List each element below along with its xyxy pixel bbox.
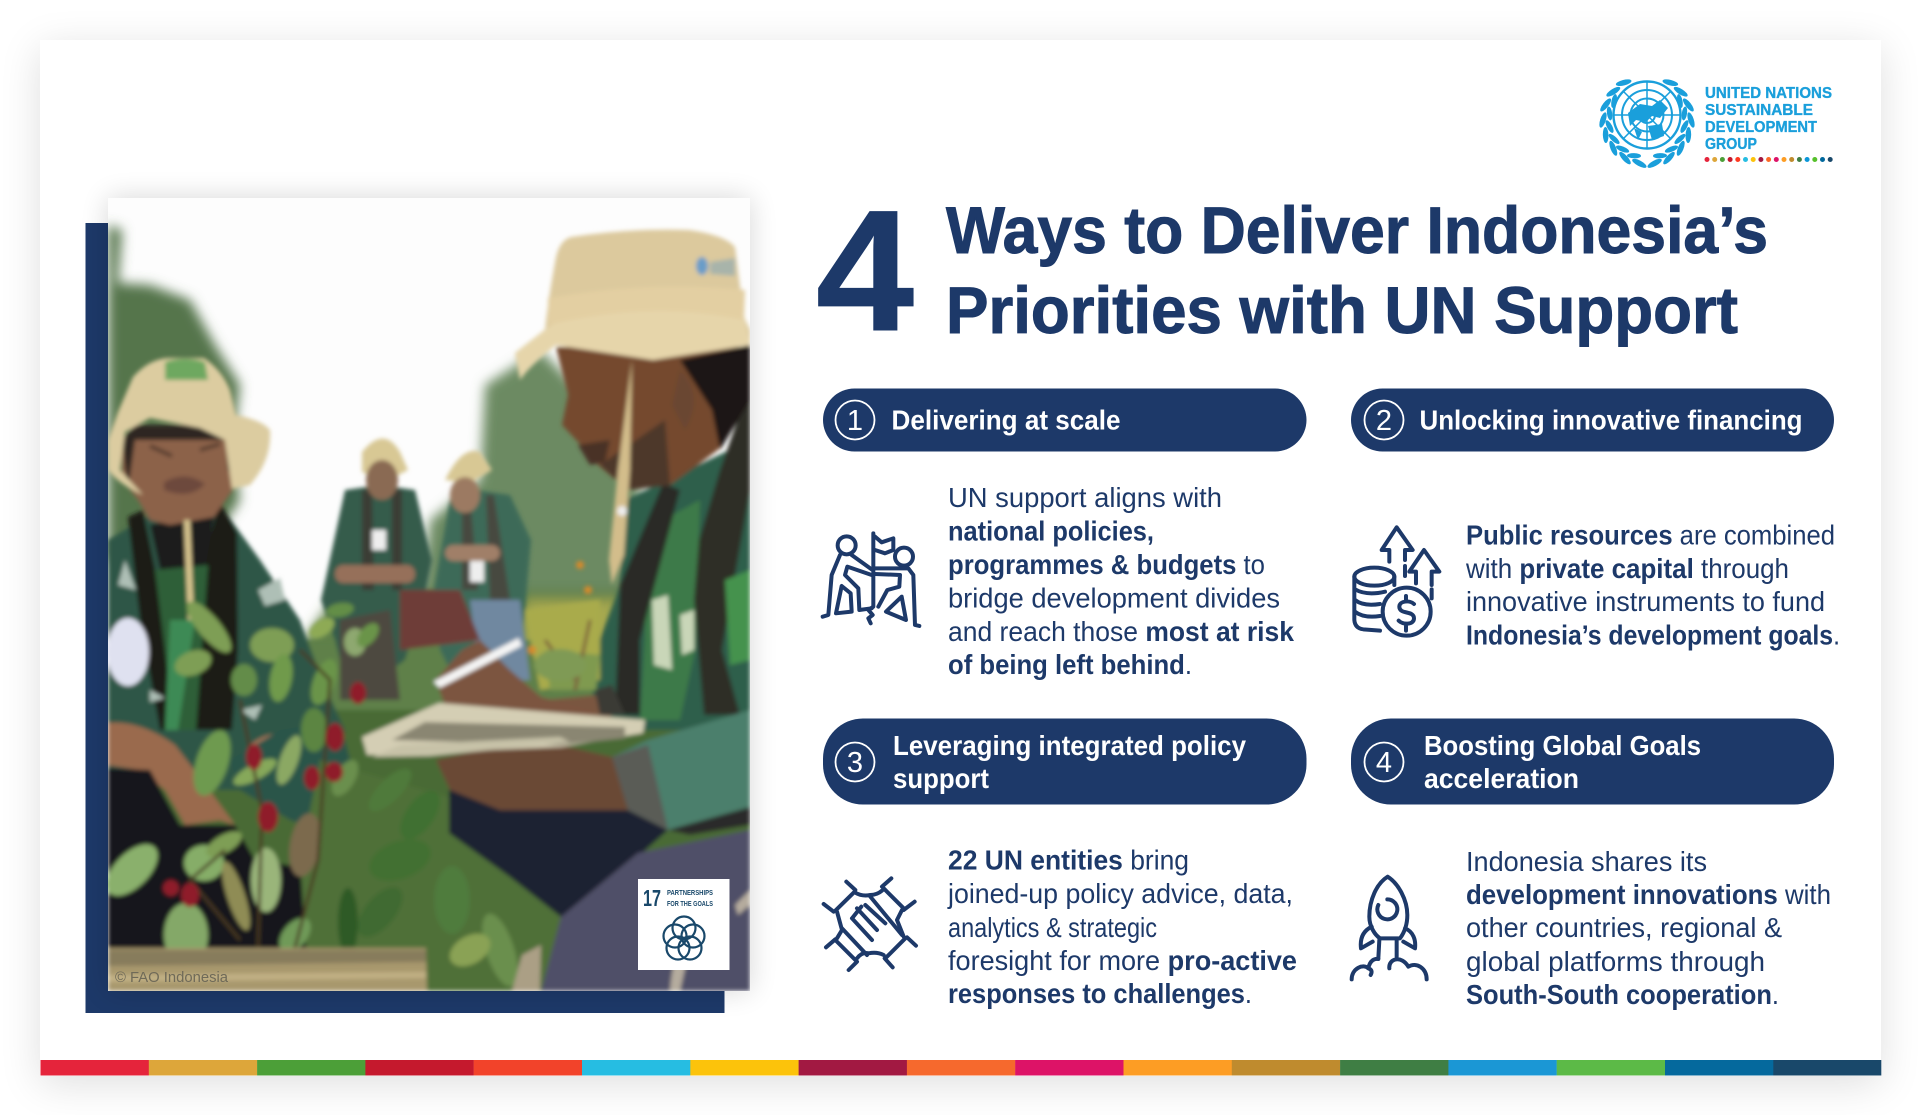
leaves bbox=[97, 595, 586, 990]
body text 3 bbox=[947, 844, 1297, 1009]
body text 4 bbox=[1466, 846, 1831, 1010]
body text 1: UN support aligns with bbox=[948, 482, 1222, 513]
pill heading 3: support bbox=[893, 763, 989, 794]
icon: stacked hands bbox=[824, 878, 916, 970]
pill heading 4 bbox=[1351, 718, 1834, 804]
stems bbox=[190, 650, 330, 948]
UN Sustainable Development Group logo bbox=[1598, 78, 1833, 170]
big number 4: 4 bbox=[816, 175, 914, 367]
panel 2: unlocking innovative financing bbox=[1351, 388, 1840, 650]
pill heading 4: Boosting Global Goals bbox=[1424, 730, 1701, 761]
photo credit: © FAO Indonesia bbox=[115, 969, 229, 986]
pill heading 4: 4 bbox=[1376, 747, 1392, 779]
UN Sustainable Development Group logo: GROUP bbox=[1705, 136, 1757, 153]
title: Ways to Deliver Indonesia’s bbox=[946, 193, 1768, 267]
title: Priorities with UN Support bbox=[946, 273, 1738, 347]
panel 3: leveraging integrated policy support bbox=[823, 718, 1306, 1009]
right sleeve bbox=[554, 693, 612, 718]
foliage mid base bbox=[298, 760, 336, 950]
right man torso and jacket bbox=[590, 440, 750, 730]
body text 3: joined-up policy advice, data, bbox=[947, 878, 1293, 909]
pill heading 1 bbox=[823, 388, 1306, 452]
photo lower background fill bbox=[156, 710, 750, 868]
hands and tablet bbox=[436, 745, 628, 810]
icon: people raising a flag bbox=[823, 533, 919, 626]
background men bbox=[321, 485, 432, 700]
icon: coins with rising arrows bbox=[1354, 527, 1439, 636]
body text 4: development innovations with bbox=[1466, 879, 1831, 910]
SDG 17 badge: PARTNERSHIPS bbox=[667, 888, 713, 897]
right man's pants bbox=[449, 790, 668, 917]
concrete bed bbox=[108, 948, 427, 991]
body text 2: with private capital through bbox=[1465, 553, 1789, 584]
body text 4: South-South cooperation. bbox=[1466, 979, 1779, 1010]
body text 4: other countries, regional & bbox=[1466, 912, 1782, 943]
left man bbox=[108, 505, 345, 790]
icon: UN emblem bbox=[1598, 78, 1696, 170]
body text 1: and reach those most at risk bbox=[948, 616, 1294, 647]
bright yellow-green plants top bbox=[525, 600, 600, 690]
body text 2: innovative instruments to fund bbox=[1466, 586, 1825, 617]
body text 2: Indonesia’s development goals. bbox=[1466, 620, 1840, 650]
body text 1 bbox=[948, 482, 1294, 680]
pill heading 1: 1 bbox=[847, 405, 863, 437]
body text 4: Indonesia shares its bbox=[1466, 846, 1707, 877]
pill heading 1: Delivering at scale bbox=[892, 404, 1120, 436]
photo of young farmers with tablet in a field bbox=[97, 198, 750, 991]
body text 3: responses to challenges. bbox=[948, 978, 1252, 1009]
body text 1: national policies, bbox=[948, 516, 1154, 546]
SDG 17 badge bbox=[638, 879, 730, 970]
wreath leaves bbox=[1598, 78, 1696, 170]
panel 1: delivering at scale bbox=[823, 388, 1306, 680]
pill heading 4: acceleration bbox=[1424, 763, 1579, 794]
pill heading 3 bbox=[823, 718, 1306, 804]
photo frame: navy backing bbox=[86, 223, 724, 1013]
pill heading 2 bbox=[1351, 388, 1834, 452]
dark lower body left bbox=[108, 768, 320, 950]
SDG 17 badge: FOR THE GOALS bbox=[667, 899, 713, 908]
body text 1: bridge development divides bbox=[948, 582, 1280, 614]
pill heading 2: 2 bbox=[1376, 405, 1392, 437]
title bbox=[946, 193, 1768, 347]
body text 4: global platforms through bbox=[1466, 946, 1765, 977]
SDG 17 badge: 17 bbox=[643, 885, 661, 911]
body text 2: Public resources are combined bbox=[1466, 520, 1835, 550]
pill heading 2: Unlocking innovative financing bbox=[1420, 404, 1802, 436]
icon: rocket bbox=[1352, 877, 1427, 979]
body text 1: programmes & budgets to bbox=[948, 549, 1265, 580]
UN Sustainable Development Group logo: SUSTAINABLE bbox=[1705, 102, 1813, 119]
body text 2 bbox=[1465, 520, 1840, 650]
pill heading 3: 3 bbox=[847, 747, 863, 779]
UN Sustainable Development Group logo: DEVELOPMENT bbox=[1705, 119, 1818, 136]
body text 3: foresight for more pro-active bbox=[948, 945, 1297, 976]
SDG colour strip bbox=[40, 1060, 1881, 1076]
body text 1: of being left behind. bbox=[948, 649, 1192, 680]
SDG colour dots bbox=[1704, 157, 1833, 162]
pill heading 3: Leveraging integrated policy bbox=[893, 730, 1246, 761]
body text 3: 22 UN entities bring bbox=[948, 844, 1189, 876]
UN Sustainable Development Group logo: UNITED NATIONS bbox=[1705, 85, 1832, 102]
red buds bbox=[163, 682, 366, 907]
panel 4: boosting global goals acceleration bbox=[1351, 718, 1834, 1010]
body text 3: analytics & strategic bbox=[948, 912, 1157, 943]
